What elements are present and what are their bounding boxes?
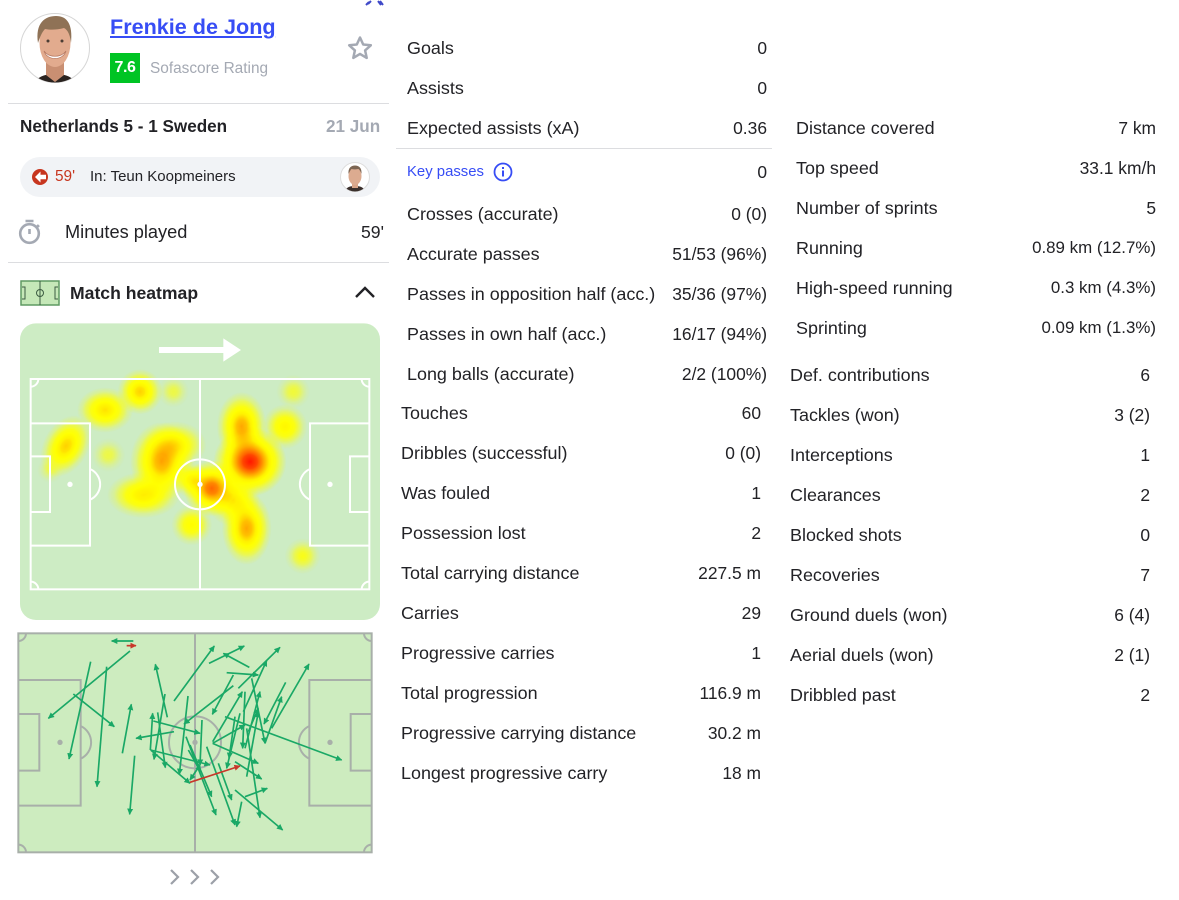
panel: physical stats (796, 118, 1156, 338)
stat: carries: Carries (401, 603, 459, 623)
stat: touches (401, 403, 761, 423)
rating label: Sofascore Rating (150, 60, 268, 77)
stat: ground duels: Ground duels (won) (790, 605, 948, 625)
stat: expected assists: 0.36 (733, 118, 767, 138)
stat: longest progressive carry: Longest progressive carry (401, 763, 607, 783)
stat: total progression (401, 683, 761, 703)
stat: crosses: Crosses (accurate) (407, 204, 559, 224)
icon: stopwatch (18, 220, 40, 244)
stat: ground duels: 6 (4) (1114, 605, 1150, 625)
stat: crosses (407, 204, 767, 224)
stat: top speed (796, 158, 1156, 178)
stat: passes in own half (407, 324, 767, 344)
stat: possession lost (401, 523, 761, 543)
stat: total carrying distance: 227.5 m (698, 563, 761, 583)
player photo (20, 13, 90, 83)
stat: touches: 60 (742, 403, 761, 423)
icon: pitch (20, 280, 60, 306)
panel: player header (20, 13, 372, 83)
icon: info (494, 162, 512, 182)
stat: clearances (790, 483, 1150, 507)
stat: key passes: 0 (757, 162, 767, 182)
stat: total progression: 116.9 m (699, 683, 761, 703)
player name: Frenkie de Jong (110, 14, 276, 39)
match date: 21 Jun (326, 117, 380, 136)
stat: was fouled: Was fouled (401, 483, 490, 503)
stat: progressive carrying distance: Progressive carrying distance (401, 723, 636, 743)
stat: high-speed running (796, 278, 1156, 298)
stat: passes in opposition half: Passes in opposition half (acc.) (407, 284, 655, 304)
panel: possession stats (401, 403, 761, 783)
stat: distance covered (796, 118, 1156, 138)
stat: blocked shots (790, 523, 1150, 547)
stat: progressive carries: 1 (751, 643, 761, 663)
stat: aerial duels (790, 643, 1150, 667)
rating badge: 7.6 (114, 59, 136, 76)
stat: sprints (796, 198, 1156, 218)
stat: key passes: Key passes (407, 164, 484, 180)
stat: accurate passes: 51/53 (96%) (672, 244, 767, 264)
panel: attacking stats (407, 38, 767, 384)
minutes label: Minutes played (65, 222, 187, 242)
stat: total carrying distance: Total carrying distance (401, 563, 579, 583)
stat: interceptions: Interceptions (790, 445, 893, 465)
stat: was fouled (401, 483, 761, 503)
stat: clearances: 2 (1140, 485, 1150, 505)
stat: progressive carries: Progressive carries (401, 643, 555, 663)
stat: high-speed running: High-speed running (796, 278, 953, 298)
stat: assists: Assists (407, 78, 464, 98)
stat: carries (401, 603, 761, 623)
panel: passes and carries map (17, 632, 373, 854)
substitute name: In: Teun Koopmeiners (90, 168, 236, 185)
attack direction arrow (159, 338, 241, 362)
stat: high-speed running: 0.3 km (4.3%) (1051, 278, 1156, 297)
stat: longest progressive carry (401, 763, 761, 783)
stat: passes in own half: Passes in own half (acc.) (407, 324, 606, 344)
stat: recoveries: Recoveries (790, 565, 880, 585)
stat: sprinting: 0.09 km (1.3%) (1041, 318, 1156, 337)
stat: running: 0.89 km (12.7%) (1032, 238, 1156, 257)
stat: goals: 0 (757, 38, 767, 58)
stat: interceptions (790, 443, 1150, 467)
stat: longest progressive carry: 18 m (722, 763, 761, 783)
substitute photo (340, 162, 370, 192)
stat: sprinting (796, 318, 1156, 338)
stat: dribbles: Dribbles (successful) (401, 443, 567, 463)
stat: sprinting: Sprinting (796, 318, 867, 338)
panel: defensive stats (790, 365, 1150, 705)
stat: passes in own half: 16/17 (94%) (672, 324, 767, 344)
match result heading: Netherlands 5 - 1 Sweden (20, 117, 227, 136)
heatmap heading: Match heatmap (70, 283, 198, 303)
stat: clearances: Clearances (790, 485, 881, 505)
stat: interceptions: 1 (1140, 445, 1150, 465)
stat: sprints: 5 (1146, 198, 1156, 218)
stat: ground duels (790, 603, 1150, 627)
stat: defensive contributions: 6 (1140, 365, 1150, 385)
stat: recoveries (790, 563, 1150, 587)
red carry arrows (127, 646, 240, 782)
stat: accurate passes: Accurate passes (407, 244, 540, 264)
stat: distance covered: 7 km (1118, 118, 1156, 138)
stat: defensive contributions: Def. contributions (790, 365, 930, 385)
stat: dribbles: 0 (0) (725, 443, 761, 463)
panel: heatmap pitch (20, 323, 380, 846)
heat blobs (30, 369, 321, 574)
stat: defensive contributions (790, 365, 1150, 385)
stat: tackles: 3 (2) (1114, 405, 1150, 425)
stat: progressive carrying distance: 30.2 m (708, 723, 761, 743)
icon: clipped top glyph (365, 0, 384, 6)
green pass arrows (48, 641, 342, 830)
stat: crosses: 0 (0) (731, 204, 767, 224)
icon: pagination chevrons (170, 869, 220, 885)
stat: accurate passes (407, 244, 767, 264)
stat: dribbled past (790, 683, 1150, 707)
stat: expected assists (407, 118, 767, 138)
icon: substitution out (32, 169, 48, 185)
stat: aerial duels: 2 (1) (1114, 645, 1150, 665)
stat: passes in opposition half: 35/36 (97%) (672, 284, 767, 304)
pitch (18, 633, 372, 852)
stat: aerial duels: Aerial duels (won) (790, 645, 934, 665)
stat: dribbled past: Dribbled past (790, 685, 896, 705)
stat: distance covered: Distance covered (796, 118, 935, 138)
panel: substitution pill (20, 157, 380, 197)
stat: assists: 0 (757, 78, 767, 98)
stat: goals: Goals (407, 38, 454, 58)
stat: long balls: Long balls (accurate) (407, 364, 575, 384)
stat: running (796, 238, 1156, 258)
stat: expected assists: Expected assists (xA) (407, 118, 579, 138)
stat: tackles: Tackles (won) (790, 405, 900, 425)
stat: total progression: Total progression (401, 683, 538, 703)
stat: goals (407, 38, 767, 58)
minutes value: 59' (361, 222, 384, 242)
stat: touches: Touches (401, 403, 468, 423)
stat: carries: 29 (742, 603, 761, 623)
stat: was fouled: 1 (751, 483, 761, 503)
stat: dribbles (401, 443, 761, 463)
stat: assists (407, 78, 767, 98)
stat: total carrying distance (401, 563, 761, 583)
stat: long balls: 2/2 (100%) (682, 364, 767, 384)
stat: sprints: Number of sprints (796, 198, 938, 218)
stat: tackles (790, 403, 1150, 427)
rating badge (110, 53, 140, 83)
stat: blocked shots: Blocked shots (790, 525, 902, 545)
stat: key passes (407, 162, 767, 182)
icon: favourite star (348, 36, 372, 60)
stat: top speed: Top speed (796, 158, 879, 178)
stat: dribbled past: 2 (1140, 685, 1150, 705)
icon: collapse chevron (355, 286, 375, 298)
stat: progressive carries (401, 643, 761, 663)
stat: passes in opposition half (407, 284, 767, 304)
pitch background (20, 323, 380, 620)
pitch markings (31, 379, 369, 589)
stat: running: Running (796, 238, 863, 258)
stat: blocked shots: 0 (1140, 525, 1150, 545)
stat: possession lost: Possession lost (401, 523, 526, 543)
stat: progressive carrying distance (401, 723, 761, 743)
stat: possession lost: 2 (751, 523, 761, 543)
stat: recoveries: 7 (1140, 565, 1150, 585)
stat: top speed: 33.1 km/h (1080, 158, 1156, 178)
stat: long balls (407, 364, 767, 384)
substitution minute: 59' (55, 168, 75, 185)
